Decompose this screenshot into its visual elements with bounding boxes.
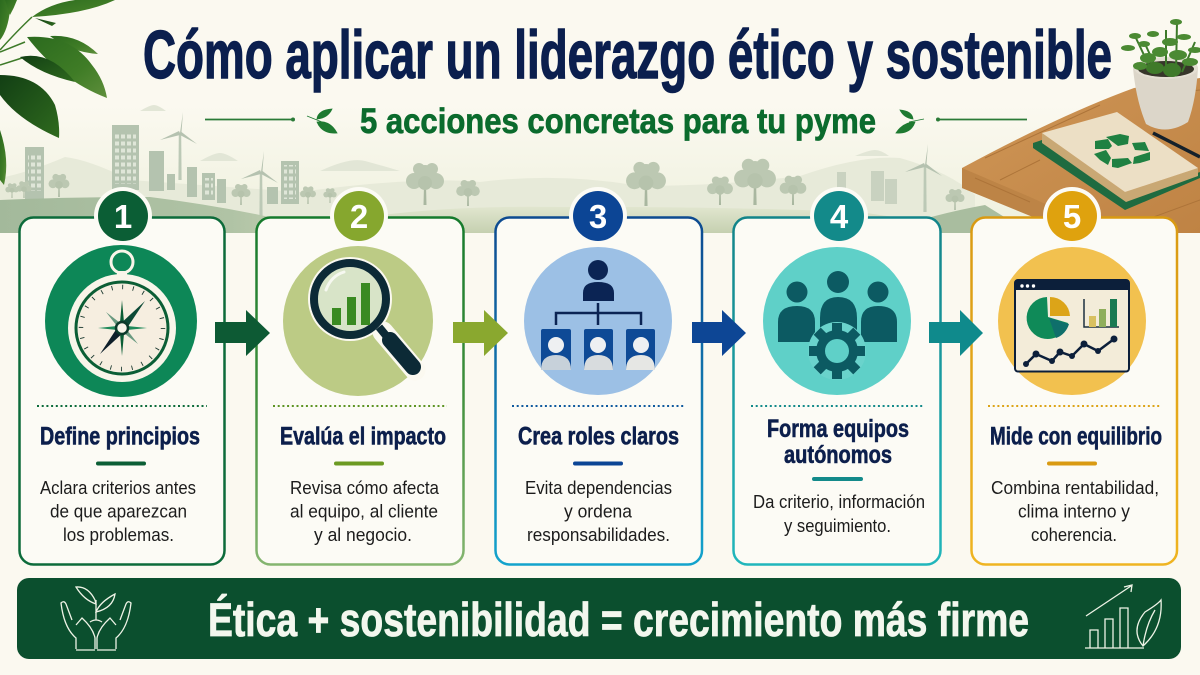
plant xyxy=(1121,19,1200,77)
arrow 1 to 2 xyxy=(215,310,270,356)
number badge 3 xyxy=(569,187,627,245)
icon: dashboard xyxy=(998,247,1146,395)
icon: team with gear xyxy=(763,247,911,395)
number badge 2: 2 xyxy=(350,198,368,235)
panel: step 4 xyxy=(734,218,940,564)
plant pot xyxy=(1133,68,1198,130)
number badge 1: 1 xyxy=(114,198,132,235)
description: Combina rentabilidad, xyxy=(991,478,1159,498)
description: de que aparezcan xyxy=(50,502,187,522)
heading: Define principios xyxy=(40,422,200,450)
description xyxy=(290,478,440,545)
subtitle with leaf ornaments: 5 acciones concretas para tu pyme xyxy=(360,102,876,141)
number badge 2 xyxy=(330,187,388,245)
bottom banner xyxy=(17,578,1181,659)
buildings xyxy=(25,125,897,204)
notebook xyxy=(1033,140,1200,210)
pen xyxy=(1153,133,1200,157)
description: Evita dependencias xyxy=(525,478,672,498)
icon: compass xyxy=(45,245,197,397)
number badge 1 xyxy=(94,187,152,245)
clouds xyxy=(140,105,889,171)
number badge 5 xyxy=(1043,187,1101,245)
icon: hands holding plant xyxy=(61,587,131,650)
icon: org chart xyxy=(524,247,672,395)
trees xyxy=(5,183,19,198)
number badge 5: 5 xyxy=(1063,198,1081,235)
number badge 4: 4 xyxy=(830,198,849,235)
panel: step 5 xyxy=(972,218,1177,564)
ground hills xyxy=(280,207,1000,233)
panel: step 2 xyxy=(256,218,464,564)
landscape: city and hills xyxy=(0,105,1200,233)
wind turbines xyxy=(160,112,197,180)
description: Revisa cómo afecta xyxy=(290,478,440,498)
heading: Crea roles claros xyxy=(518,422,679,450)
arrow 4 to 5 xyxy=(929,310,983,356)
dotted divider xyxy=(988,405,1160,407)
arrow 2 to 3 xyxy=(453,310,508,356)
panel: step 3 xyxy=(496,218,702,564)
number badge 4 xyxy=(810,187,868,245)
heading: Evalúa el impacto xyxy=(280,422,446,450)
description: clima interno y xyxy=(1018,502,1130,522)
description: los problemas. xyxy=(63,525,174,545)
heading xyxy=(767,415,909,469)
building windows xyxy=(28,134,296,199)
panel: step 1 xyxy=(20,218,224,564)
description xyxy=(525,478,672,545)
icon: magnifying glass with bars xyxy=(283,246,433,396)
botanical leaves top left xyxy=(0,0,115,185)
description xyxy=(753,492,925,536)
description: Aclara criterios antes xyxy=(40,478,196,498)
heading: Forma equipos xyxy=(767,415,909,443)
description xyxy=(991,478,1159,545)
wooden desk with notebook and plant xyxy=(962,19,1200,233)
description: Da criterio, información xyxy=(753,492,925,512)
arrow 3 to 4 xyxy=(692,310,746,356)
description xyxy=(40,478,196,545)
heading: autónomos xyxy=(784,441,892,469)
description: coherencia. xyxy=(1031,525,1117,545)
description: al equipo, al cliente xyxy=(290,502,438,522)
icon: growth chart with leaf xyxy=(1085,585,1161,648)
description: y al negocio. xyxy=(314,525,412,545)
icon: recycling symbol xyxy=(1094,134,1150,168)
dotted divider xyxy=(751,405,924,407)
number badge 3: 3 xyxy=(589,198,607,235)
description: y ordena xyxy=(564,502,633,522)
dotted divider xyxy=(512,405,685,407)
dotted divider xyxy=(37,405,207,407)
description: responsabilidades. xyxy=(527,525,670,545)
dotted divider xyxy=(273,405,447,407)
description: y seguimiento. xyxy=(784,516,891,536)
